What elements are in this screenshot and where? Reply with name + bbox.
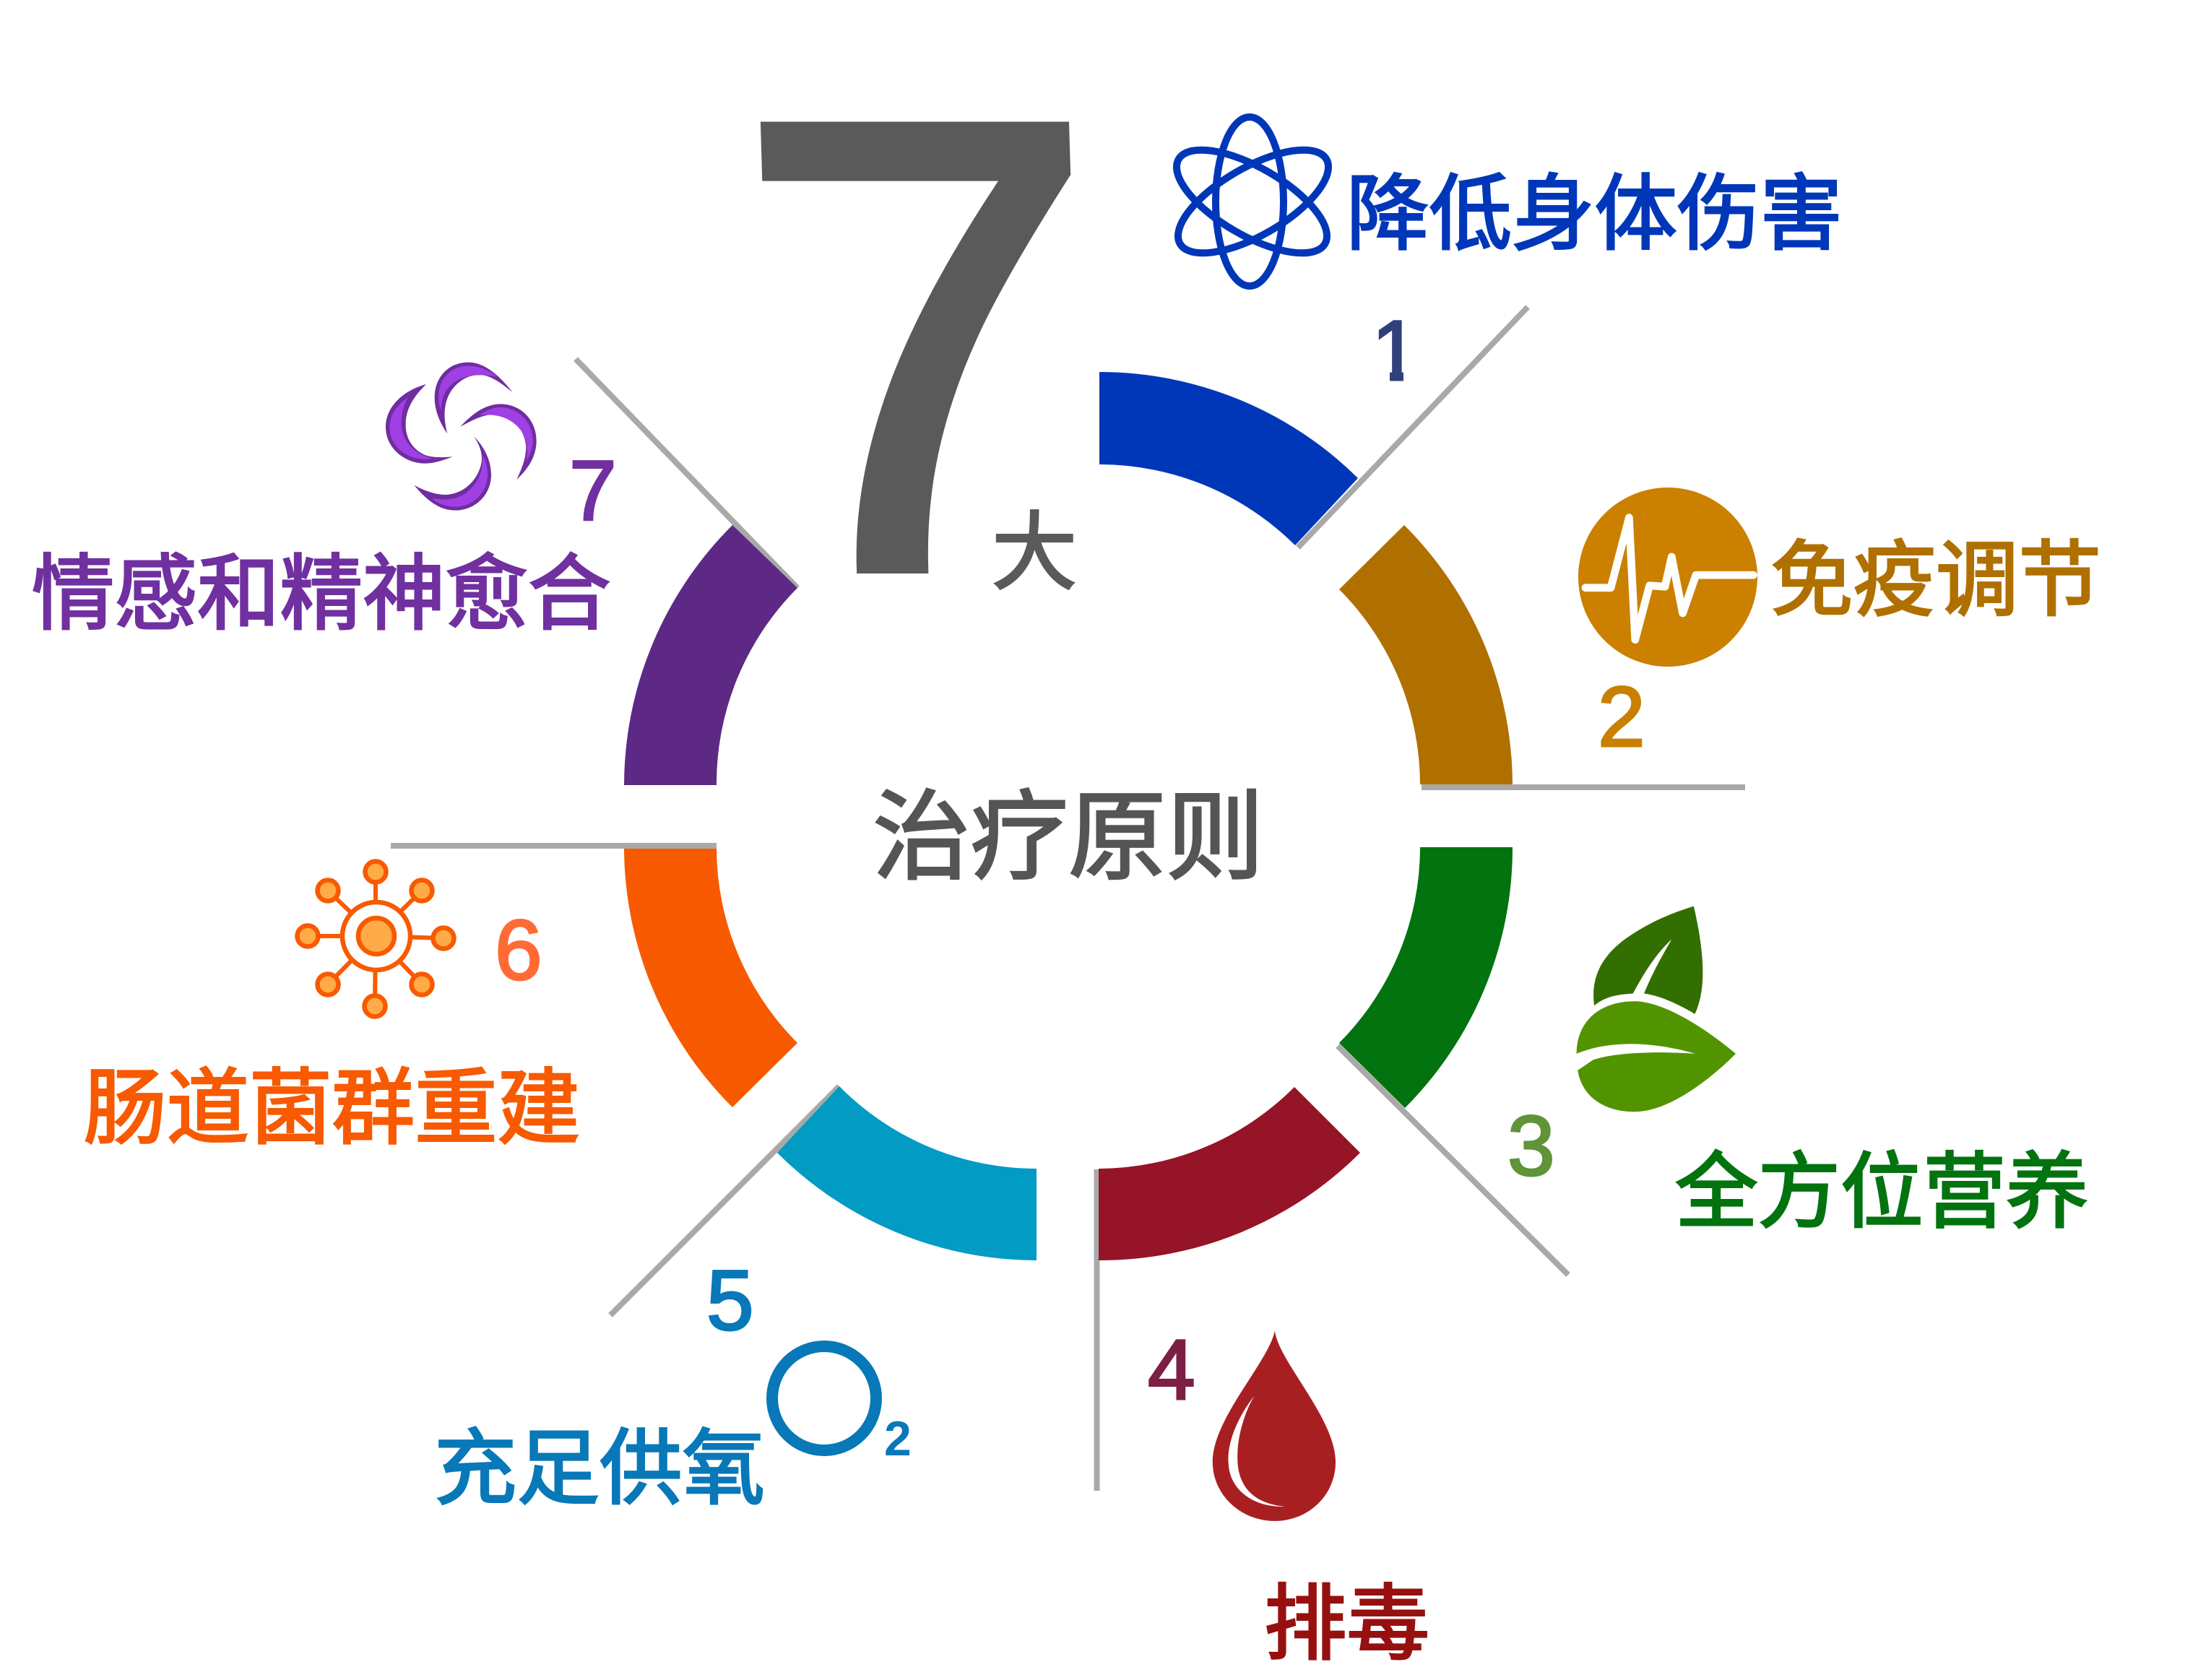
segment 6: orange — [624, 849, 797, 1107]
central ring of seven segments — [624, 372, 1513, 1260]
principle 2: immune regulation — [1578, 488, 2101, 765]
label: 免疫调节 — [1770, 534, 2101, 627]
segment 2: brown — [1339, 525, 1513, 784]
principle 7: emotional and spiritual healing — [32, 363, 617, 641]
number: 2 — [1598, 670, 1645, 765]
number: 3 — [1507, 1099, 1555, 1194]
number: 4 — [1148, 1322, 1195, 1418]
segment 3: green — [1339, 847, 1513, 1108]
label: 肠道菌群重建 — [84, 1062, 580, 1155]
segment 5: cyan — [777, 1086, 1037, 1260]
principle 6: gut flora rebuilding — [84, 861, 580, 1155]
label: 排毒 — [1264, 1578, 1429, 1671]
number: 7 — [569, 443, 617, 539]
segment 4: crimson — [1099, 1087, 1360, 1260]
segment 1: blue — [1099, 372, 1358, 545]
icon: microbe — [298, 861, 454, 1017]
label: 情感和精神愈合 — [32, 548, 611, 641]
icon: blood drop — [1213, 1330, 1336, 1521]
number: 1 — [1372, 303, 1419, 399]
icon: atom — [1161, 117, 1344, 286]
principle 4: detox — [1148, 1322, 1429, 1671]
icon: purple swirl — [386, 363, 537, 511]
label: 充足供氧 — [434, 1423, 765, 1515]
principle 3: all-round nutrition — [1507, 906, 2089, 1239]
icon: leaves — [1577, 906, 1736, 1112]
big numeral 7: 7 — [729, 0, 1113, 703]
number: 6 — [495, 903, 542, 998]
principle 5: sufficient oxygen — [434, 1253, 912, 1515]
principle 1: reduce body damage — [1161, 117, 1843, 399]
label: 全方位营养 — [1675, 1146, 2089, 1239]
heading character: 大: 大 — [992, 506, 1077, 601]
centre title: 治疗原则 — [873, 782, 1264, 892]
divider lines — [391, 307, 1745, 1491]
icon: O2 ring: 2 — [884, 1411, 912, 1466]
icon: heartbeat circle — [1578, 488, 1757, 667]
segment 7: purple — [624, 525, 797, 785]
icon: O2 ring — [772, 1346, 912, 1466]
number: 5 — [706, 1253, 754, 1348]
label: 降低身体伤害 — [1346, 168, 1843, 261]
